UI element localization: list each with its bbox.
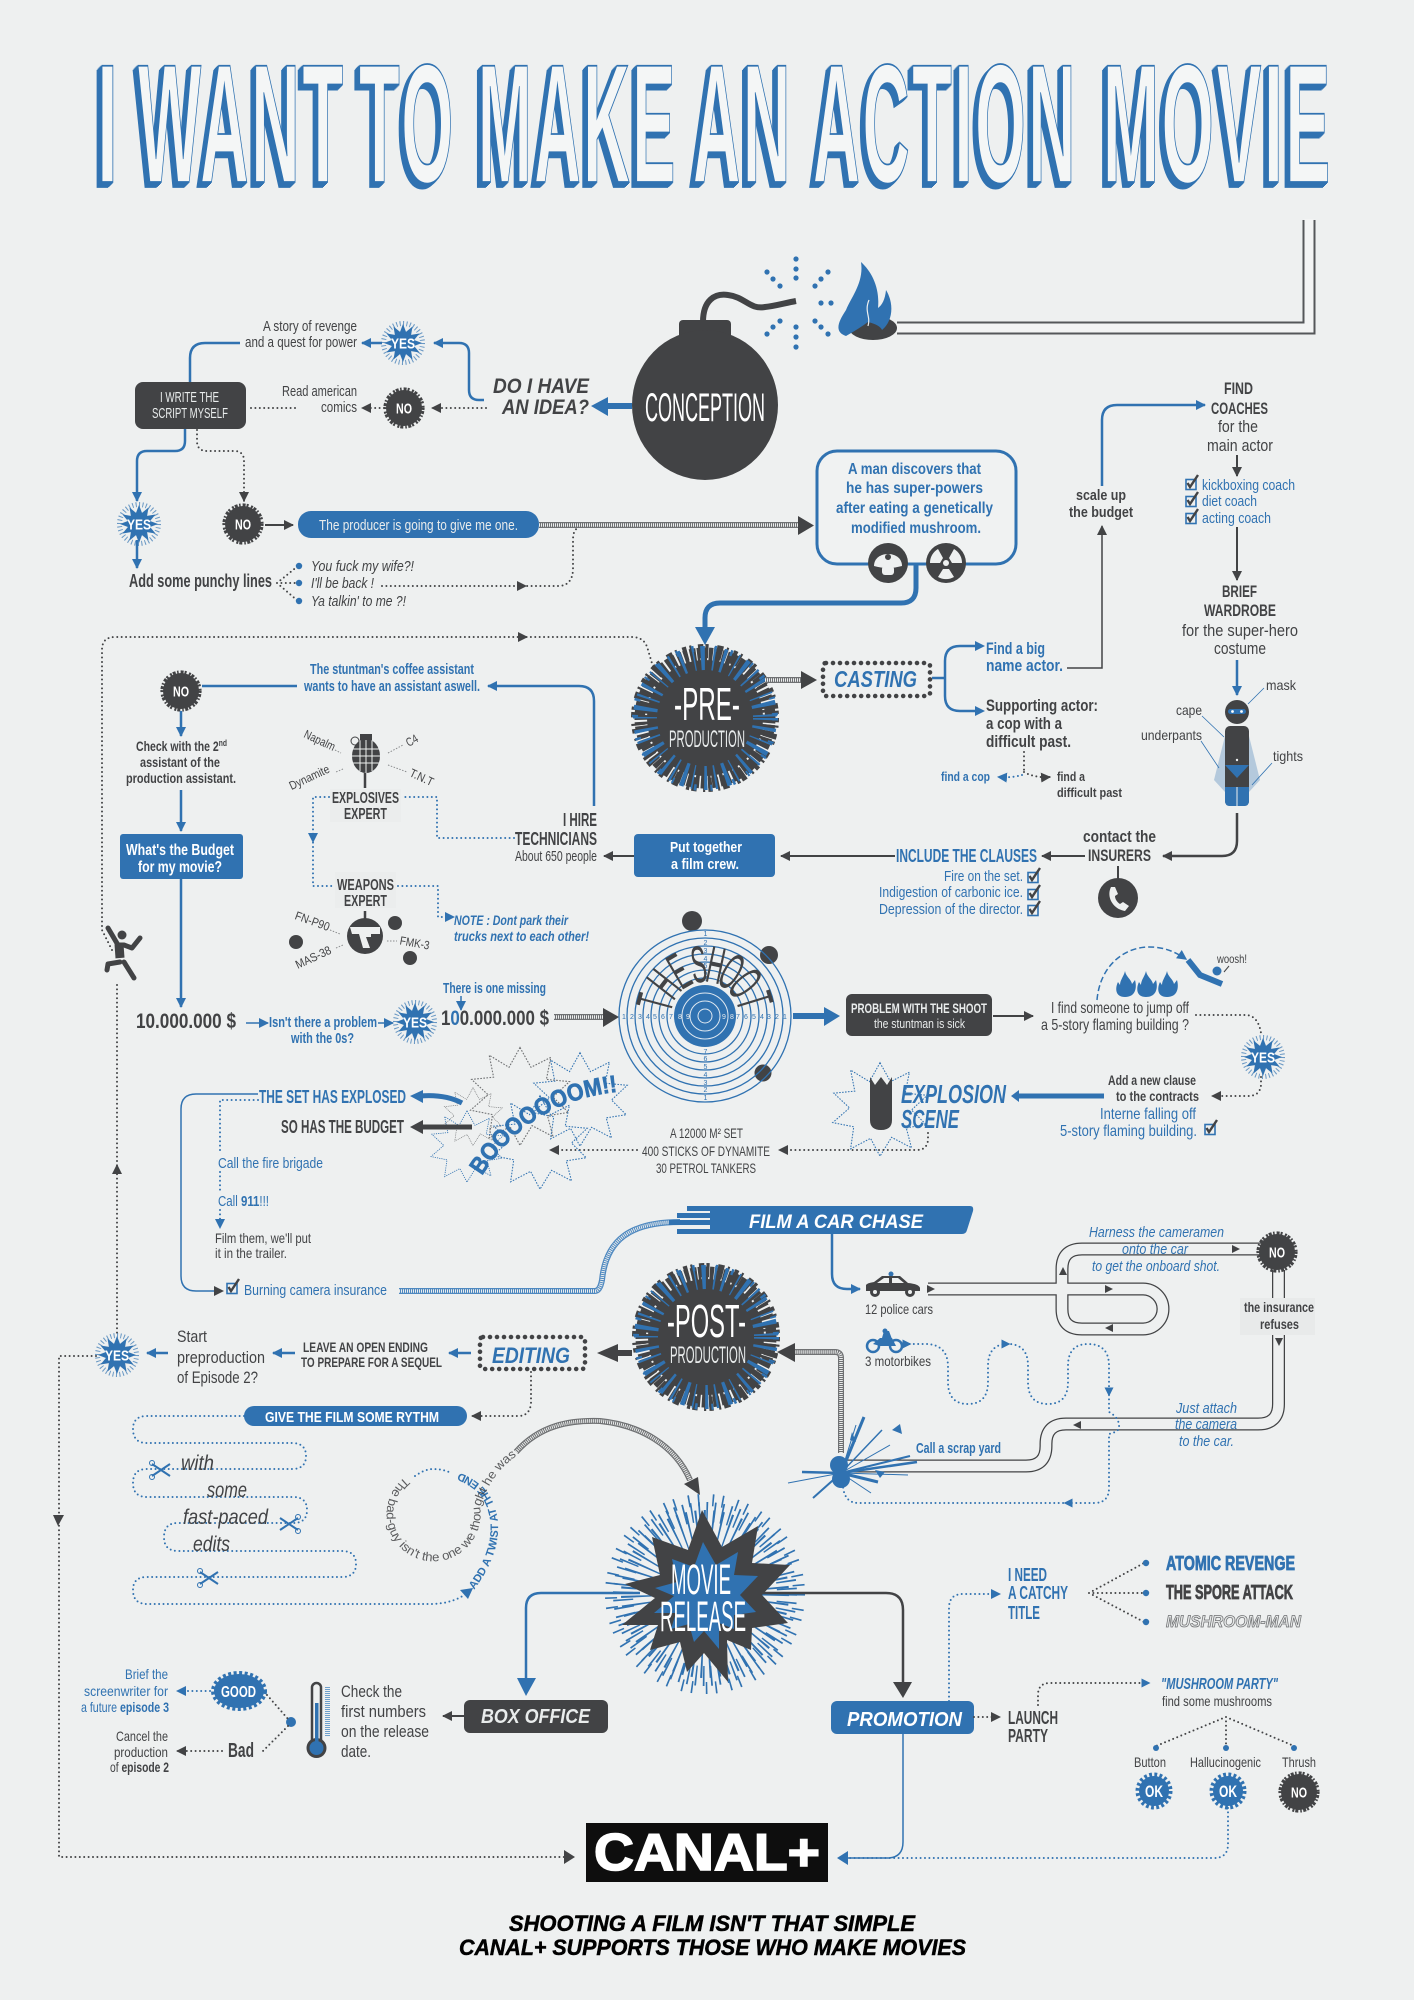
branch: no idea: NO — [396, 400, 412, 418]
box: editing: EDITING — [492, 1343, 570, 1368]
branch: producer gives me one: NO — [235, 516, 251, 534]
the shoot lettering: O — [717, 958, 773, 1009]
budget numbers: 100.000.000 $ — [441, 1007, 549, 1030]
stuntman's assistant branch: assistant of the — [140, 754, 220, 770]
promotion — [831, 1594, 1000, 1858]
box office: on the release — [341, 1722, 429, 1741]
stage: the shoot target — [619, 911, 840, 1102]
catchy title: I NEED — [1008, 1565, 1047, 1585]
branch: producer gives me one — [197, 430, 814, 543]
box: editing — [98, 1327, 585, 1387]
contact the insurers — [1042, 813, 1237, 918]
casting branches: Find a big — [986, 639, 1045, 658]
box: put together a film crew — [604, 834, 775, 877]
include the clauses: Depression of the director. — [879, 901, 1023, 918]
box: put together a film crew: Put together — [670, 839, 742, 856]
stuntman's assistant branch: NO — [173, 684, 189, 700]
I hire technicians: I HIRE — [563, 810, 597, 830]
find coaches: for the — [1218, 417, 1258, 436]
box: editing: YES — [105, 1348, 129, 1364]
box office: first numbers — [341, 1702, 426, 1721]
brief wardrobe: WARDROBE — [1204, 601, 1276, 620]
budget numbers: YES — [403, 1014, 427, 1032]
stage: the shoot target: 1234567 — [704, 931, 708, 983]
box office results: of episode 2 — [110, 1759, 169, 1775]
box: what's the budget — [120, 834, 243, 1007]
box: I write the script myself: SCRIPT MYSELF — [152, 405, 228, 422]
catchy title: THE SPORE ATTACK — [1166, 1582, 1293, 1604]
stage: post-production — [597, 1267, 841, 1453]
branch: producer gives me one: The producer is going to give me one. — [319, 517, 518, 534]
icon: radiation — [926, 543, 966, 583]
the set has exploded — [181, 1087, 680, 1299]
box: what's the budget: for my movie? — [138, 859, 222, 876]
jump off a flaming building — [1041, 947, 1282, 1140]
stage: post-production: -POST- — [667, 1295, 746, 1347]
insurance road to crash: Just attach — [1175, 1400, 1237, 1417]
explosives expert: EXPERT — [344, 806, 387, 823]
insurance road to crash: the insurance — [1244, 1299, 1314, 1315]
the set has exploded: Film them, we'll put — [215, 1230, 311, 1246]
matchstick — [897, 220, 1309, 328]
the set has exploded: THE SET HAS EXPLOSED — [259, 1087, 406, 1107]
weapons expert: EXPERT — [344, 893, 387, 910]
jump off a flaming building: Interne falling off — [1100, 1106, 1196, 1123]
icon: bomb with lit match — [632, 219, 1309, 480]
branch: no idea: Read american — [282, 383, 357, 400]
launch party — [837, 1676, 1318, 1865]
match head — [849, 316, 897, 340]
stage: the shoot target: 1234567 — [704, 1049, 708, 1102]
box: editing: preproduction — [177, 1348, 265, 1367]
arrow: release to box office — [517, 1593, 640, 1696]
arrow: release to promotion — [760, 1593, 912, 1698]
I hire technicians — [488, 686, 597, 865]
give the film some rythm — [133, 1372, 531, 1604]
budget numbers: There is one missing — [443, 980, 546, 997]
icon: diving stuntman — [1188, 960, 1222, 984]
branch: yes I have an idea: and a quest for power — [245, 334, 357, 351]
box: casting: CASTING — [834, 666, 917, 692]
catchy title — [1008, 1553, 1302, 1631]
icon: falling stuntman — [107, 928, 140, 978]
arrow: story to pre-production — [695, 565, 916, 645]
icon: flames — [1116, 971, 1178, 997]
find coaches: FIND — [1224, 379, 1253, 398]
box: editing: Start — [177, 1327, 207, 1346]
wick — [703, 295, 796, 322]
title — [97, 29, 1333, 218]
catchy title: A CATCHY — [1008, 1583, 1068, 1603]
icon: crash splash: Call a scrap yard — [916, 1440, 1001, 1457]
the shoot lettering: T — [625, 988, 685, 1017]
stuntman loop back path — [102, 632, 654, 1335]
insurance road to crash: refuses — [1260, 1316, 1299, 1332]
casting branches: difficult past — [1057, 785, 1123, 800]
explosion scene: 30 PETROL TANKERS — [656, 1160, 756, 1176]
stage: post-production: PRODUCTION — [670, 1342, 746, 1369]
give the film some rythm: some — [207, 1479, 247, 1502]
branch: punchy lines: Ya talkin' to me ?! — [311, 593, 407, 610]
the shoot lettering: H — [636, 960, 692, 1009]
box office results: Brief the — [125, 1666, 168, 1682]
box office: BOX OFFICE — [481, 1706, 591, 1728]
give the film some rythm: fast-paced — [183, 1506, 269, 1529]
weapons expert: WEAPONS — [337, 877, 394, 894]
branch: punchy lines: YES — [127, 516, 151, 534]
box: I write the script myself: I WRITE THE — [160, 389, 219, 406]
motorbikes route — [843, 1328, 1119, 1508]
find coaches: COACHES — [1211, 399, 1268, 418]
explosives expert: Napalm — [302, 727, 338, 754]
brief wardrobe: for the super-hero — [1182, 621, 1298, 640]
give the film some rythm: with — [181, 1452, 214, 1475]
the set has exploded: Call 911!!! — [218, 1193, 269, 1210]
arrow: conception to idea — [591, 397, 632, 416]
police cars road loop — [865, 1224, 1263, 1332]
weapons expert: MAS-38 — [293, 943, 334, 972]
budget numbers: 10.000.000 $ — [136, 1010, 236, 1033]
jump off a flaming building: to the contracts — [1116, 1088, 1199, 1104]
box office results: GOOD — [221, 1684, 256, 1701]
police cars road loop: onto the car — [1122, 1241, 1189, 1258]
motorbikes route: 3 motorbikes — [865, 1353, 931, 1369]
branch: punchy lines: Add some punchy lines — [129, 571, 272, 591]
scale up the budget: scale up — [1076, 487, 1126, 504]
stage: the shoot target: 1234567 — [622, 1014, 673, 1021]
the shoot lettering: O — [709, 942, 754, 1001]
stage: pre-production — [635, 648, 775, 788]
scale up the budget: the budget — [1069, 504, 1133, 521]
stage: movie release: RELEASE — [660, 1593, 746, 1641]
launch party: Hallucinogenic — [1190, 1754, 1261, 1770]
I hire technicians: TECHNICIANS — [515, 829, 597, 849]
weapons expert: FMK-3 — [399, 934, 431, 953]
explosion scene: A 12000 M² SET — [670, 1125, 743, 1141]
weapons expert: FN-P90 — [293, 909, 332, 934]
box office results: a future episode 3 — [81, 1699, 169, 1715]
budget numbers — [136, 980, 619, 1047]
weapons expert — [289, 872, 589, 972]
the set has exploded: Burning camera insurance — [244, 1282, 387, 1299]
the set has exploded: Call the fire brigade — [218, 1155, 323, 1172]
contact the insurers: contact the — [1083, 827, 1156, 846]
icon: superhero costume: tights — [1273, 748, 1303, 764]
icon: telephone — [1098, 878, 1138, 918]
heading: do I have an idea: AN IDEA? — [501, 396, 589, 419]
box: story of the mushroom: he has super-powers — [846, 480, 983, 497]
the shoot lettering: T — [724, 986, 784, 1016]
box office results: Bad — [228, 1740, 254, 1762]
promotion: PROMOTION — [847, 1709, 963, 1731]
the shoot lettering: S — [688, 935, 710, 995]
box: editing: TO PREPARE FOR A SEQUEL — [301, 1354, 442, 1370]
casting branches: find a — [1057, 769, 1086, 784]
casting branches: a cop with a — [986, 714, 1062, 733]
brief wardrobe — [1182, 582, 1298, 695]
explosives expert: EXPLOSIVES — [332, 790, 399, 807]
jump off a flaming building: Add a new clause — [1108, 1072, 1196, 1088]
branch: no idea — [249, 383, 486, 427]
box: problem with the shoot — [846, 994, 1033, 1036]
branch: yes I have an idea: YES — [391, 336, 415, 352]
scale up the budget — [1067, 405, 1205, 668]
explosives expert — [287, 727, 514, 886]
weapons expert: NOTE : Dont park their — [454, 912, 569, 928]
stage: movie release — [611, 1500, 799, 1688]
insurance road to crash: to the car. — [1179, 1433, 1234, 1450]
box: problem with the shoot: the stuntman is sick — [874, 1016, 965, 1031]
police cars road loop: 12 police cars — [865, 1301, 933, 1317]
jump off a flaming building: a 5-story flaming building ? — [1041, 1017, 1189, 1034]
stage: pre-production: -PRE- — [674, 678, 740, 730]
box office — [262, 1682, 608, 1761]
explosion scene: EXPLOSION — [901, 1079, 1007, 1109]
sparks — [764, 256, 834, 350]
title: AN — [693, 29, 793, 218]
footer tagline: SHOOTING A FILM ISN'T THAT SIMPLE — [509, 1911, 916, 1936]
launch party: OK — [1219, 1782, 1238, 1801]
include the clauses: Indigestion of carbonic ice. — [879, 884, 1023, 901]
box office: Check the — [341, 1682, 402, 1701]
explosives expert: Dynamite — [287, 762, 332, 793]
the shoot lettering — [625, 935, 784, 1017]
heading: do I have an idea: DO I HAVE — [493, 375, 590, 398]
explosion boom — [430, 1046, 628, 1189]
footer tagline — [459, 1911, 966, 1960]
find coaches: main actor — [1207, 436, 1273, 455]
explosion scene: 400 STICKS OF DYNAMITE — [642, 1143, 770, 1159]
box office results: screenwriter for — [84, 1683, 168, 1699]
banner: film a car chase: FILM A CAR CHASE — [749, 1212, 924, 1233]
icon: superhero costume — [1141, 677, 1303, 806]
stuntman's assistant branch: wants to have an assistant aswell. — [303, 678, 480, 695]
stage: the shoot target: 1234567 — [736, 1014, 787, 1021]
title: TO — [359, 29, 456, 218]
stuntman's assistant branch: nd — [219, 738, 227, 748]
launch party: OK — [1145, 1782, 1164, 1801]
casting branches: Supporting actor: — [986, 696, 1098, 715]
contact the insurers: INSURERS — [1088, 846, 1151, 865]
heading: do I have an idea — [493, 375, 590, 419]
box: story of the mushroom: after eating a genetically — [836, 500, 993, 517]
police cars road loop: to get the onboard shot. — [1092, 1258, 1220, 1275]
title: MAKE — [478, 29, 678, 218]
include the clauses: INCLUDE THE CLAUSES — [896, 846, 1037, 866]
icon: falling bomb — [870, 1077, 892, 1130]
launch party: PARTY — [1008, 1726, 1048, 1746]
explosives expert: C4 — [403, 731, 421, 750]
the shoot lettering: H — [702, 935, 730, 996]
explosion boom: BOOOOOOOM!!!! — [468, 1075, 616, 1176]
jump off a flaming building: YES — [1251, 1050, 1275, 1066]
branch: yes I have an idea — [190, 318, 484, 400]
icon: superhero costume: mask — [1266, 677, 1297, 693]
catchy title: MUSHROOM-MAN — [1166, 1612, 1302, 1631]
the set has exploded: SO HAS THE BUDGET — [281, 1117, 404, 1137]
banner: film a car chase — [669, 1206, 973, 1289]
budget numbers: Isn't there a problem — [269, 1014, 377, 1031]
brief wardrobe: costume — [1214, 639, 1266, 658]
weapons expert: trucks next to each other! — [454, 928, 589, 944]
launch party: NO — [1291, 1784, 1307, 1802]
stuntman's assistant branch: production assistant. — [126, 770, 236, 786]
stage: the shoot target: 89 — [722, 1014, 734, 1021]
flame — [838, 262, 891, 336]
find coaches: acting coach — [1202, 510, 1271, 527]
give the film some rythm: GIVE THE FILM SOME RYTHM — [265, 1409, 439, 1426]
launch party: Thrush — [1282, 1754, 1316, 1770]
icon: grenade — [351, 734, 380, 788]
branch: punchy lines: You fuck my wife?! — [311, 558, 415, 575]
launch party: find some mushrooms — [1162, 1693, 1272, 1709]
the set has exploded: it in the trailer. — [215, 1245, 287, 1261]
box: editing: LEAVE AN OPEN ENDING — [303, 1339, 428, 1355]
jump off a flaming building: I find someone to jump off — [1051, 1000, 1189, 1017]
icon: superhero costume: cape — [1176, 702, 1202, 718]
icon: police car — [866, 1272, 920, 1297]
explosion scene — [550, 1063, 1104, 1176]
box: what's the budget: What's the Budget — [126, 842, 235, 859]
catchy title: ATOMIC REVENGE — [1166, 1553, 1295, 1575]
explosives expert: T.N.T — [407, 766, 437, 789]
catchy title: TITLE — [1008, 1603, 1040, 1623]
box: problem with the shoot: PROBLEM WITH THE SHOOT — [851, 1000, 987, 1016]
launch party: "MUSHROOM PARTY" — [1161, 1676, 1278, 1693]
casting branches: find a cop — [941, 769, 990, 784]
icon: superhero costume: underpants — [1141, 727, 1202, 743]
casting branches: difficult past. — [986, 732, 1071, 751]
branch: punchy lines — [120, 429, 578, 610]
box office: date. — [341, 1742, 371, 1761]
stage: the shoot target: 89 — [678, 1014, 690, 1021]
casting branches — [932, 639, 1123, 800]
launch party: LAUNCH — [1008, 1708, 1058, 1728]
brief wardrobe: BRIEF — [1222, 582, 1257, 601]
box office results: Cancel the — [116, 1728, 168, 1744]
box office results — [81, 1666, 265, 1775]
bomb body — [679, 320, 731, 355]
branch: yes I have an idea: A story of revenge — [263, 318, 357, 335]
explosion scene: SCENE — [901, 1104, 959, 1134]
insurance road to crash: the camera — [1175, 1416, 1237, 1433]
box: story of the mushroom: modified mushroom. — [851, 520, 981, 537]
icon: mushroom — [868, 543, 908, 583]
insurance road to crash: NO — [1269, 1244, 1285, 1262]
insurance road to crash — [844, 1233, 1315, 1466]
footer tagline: CANAL+ SUPPORTS THOSE WHO MAKE MOVIES — [459, 1935, 966, 1960]
logo: canal plus: CANAL+ — [594, 1824, 820, 1882]
box: story of the mushroom — [817, 451, 1016, 583]
jump off a flaming building: woosh! — [1216, 952, 1247, 966]
box office results: production — [114, 1744, 168, 1760]
I hire technicians: About 650 people — [515, 848, 597, 865]
box: put together a film crew: a film crew. — [671, 856, 739, 873]
icon: pistol — [347, 918, 383, 954]
box: casting — [765, 663, 930, 696]
jump off a flaming building: 5-story flaming building. — [1060, 1123, 1197, 1140]
find coaches: kickboxing coach — [1202, 477, 1295, 494]
stuntman's assistant branch — [126, 661, 480, 831]
include the clauses — [781, 846, 1040, 918]
icon: scissors — [150, 1460, 300, 1588]
icon: crash splash — [788, 1417, 1001, 1498]
icon: bomb with lit match: CONCEPTION — [645, 386, 765, 430]
stuntman's assistant branch: Check with the 2 — [136, 738, 246, 754]
box: story of the mushroom: A man discovers that — [848, 461, 982, 478]
box: I write the script myself — [135, 382, 246, 429]
branch: punchy lines: I'll be back ! — [311, 575, 375, 592]
give the film some rythm: edits — [193, 1533, 230, 1556]
find coaches: diet coach — [1202, 493, 1257, 510]
twist at the end spiral — [386, 1418, 700, 1590]
stage: pre-production: PRODUCTION — [669, 726, 745, 753]
the shoot lettering: E — [658, 942, 700, 1000]
twist at the end spiral: ADD A TWIST AT THE END — [458, 1474, 498, 1590]
icon: motorbike — [867, 1328, 902, 1352]
branch: no idea: comics — [321, 399, 357, 416]
launch party: Button — [1134, 1754, 1166, 1770]
stuntman's assistant branch: The stuntman's coffee assistant — [310, 661, 474, 678]
title: I — [97, 29, 121, 218]
casting branches: name actor. — [986, 656, 1063, 675]
include the clauses: Fire on the set. — [944, 868, 1023, 885]
sequel path to canal plus — [53, 1356, 575, 1864]
box: editing: of Episode 2? — [177, 1368, 258, 1387]
title: WANT — [138, 29, 346, 218]
twist at the end spiral: The bad-guy isn't the one we thought he was — [386, 1452, 516, 1562]
stage: movie release: MOVIE — [671, 1556, 731, 1604]
icon: thermometer — [306, 1683, 328, 1758]
find coaches — [1186, 379, 1295, 580]
budget numbers: with the 0s? — [290, 1030, 354, 1047]
police cars road loop: Harness the cameramen — [1089, 1224, 1224, 1241]
